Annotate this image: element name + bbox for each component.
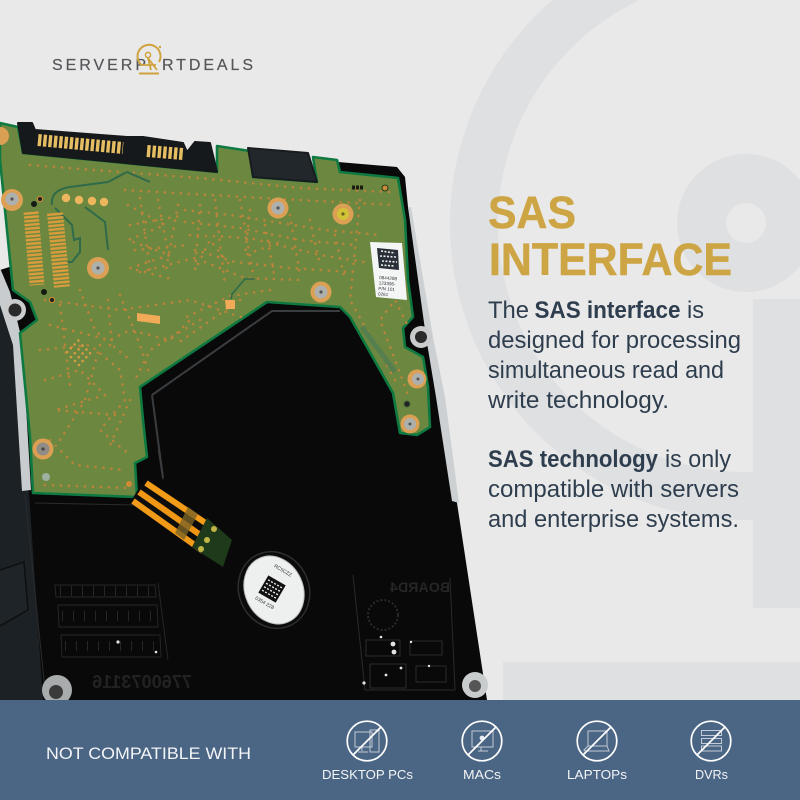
embossed grid left [55,583,168,660]
hard drive photo [0,123,488,705]
orange rectangular pads [137,300,235,324]
left charcoal casing [0,300,43,700]
heading [488,187,732,285]
logo: ServerPartDeals: RTDEALS [162,57,253,74]
white barcode label: 123396- [379,280,396,287]
label: desktop PCs: DESKTOP PCs [322,767,414,782]
sticker data matrix [258,575,286,603]
board mounting screws [0,127,426,487]
small via holes [31,196,410,407]
paragraph: SAS interface: designed for processing [488,327,741,354]
footer heading: NOT COMPATIBLE WITH [46,744,251,763]
drive body [0,162,487,700]
footer band [0,700,800,800]
white barcode label [370,242,407,300]
white barcode label: 0844288 [379,275,398,281]
round serial sticker [238,551,310,629]
SATA gold pins [38,140,123,148]
logo: ServerPartDeals [52,45,253,74]
black via row [352,186,363,190]
label: laptops: LAPTOPs [567,767,628,782]
black chassis edge lines [25,450,163,690]
paragraph: SAS technology: and enterprise systems. [488,506,739,533]
round serial sticker: 0354 228 [254,596,275,611]
icon: DVRs crossed out [691,721,731,761]
white barcode label: 0261 [378,291,389,297]
black cover highlight [152,311,340,478]
embossed grid dots [116,640,157,653]
round serial sticker: RC5CZZ [273,563,293,578]
paragraph: SAS technology: SAS technology [488,446,658,473]
label: Macs: MACs [463,767,502,782]
dense chip pad [67,340,92,365]
embossed grid right [353,575,455,690]
heading: SAS [488,187,576,238]
circuit board [0,123,430,497]
mounting holes [4,299,432,348]
flex cable band [175,507,198,540]
paragraph: SAS interface [487,297,741,414]
right silver rail [408,207,459,503]
icon: desktop PCs crossed out [347,721,387,761]
label: DVRs: DVRs [695,767,728,782]
paragraph: SAS technology [488,446,739,533]
left casing panel lines [0,562,28,626]
gold contact strip 2 [55,213,62,287]
decorative watermark: information symbol [474,0,800,700]
paragraph: SAS interface: is [687,297,704,324]
paragraph: SAS interface: SAS interface [534,297,680,324]
SATA connector [18,123,217,172]
SATA power pins [147,151,183,154]
embossed grid right: BOARD4 [390,579,450,595]
heading: INTERFACE [489,234,732,285]
dark traces [52,172,150,262]
secondary connector [248,148,317,182]
logo: ServerPartDeals: SERVERP [52,57,146,74]
paragraph: SAS interface: simultaneous read and [488,357,724,384]
paragraph: SAS technology: is only [665,446,732,473]
left silver rail [0,268,31,491]
paragraph: SAS interface: write technology. [487,387,669,414]
white barcode label: P/N 101 [378,286,396,292]
flex cable connector [192,518,232,567]
icon: laptops crossed out [577,721,617,761]
paragraph: SAS interface: The [488,297,529,324]
icon: Macs crossed out [462,721,502,761]
flex cable [131,478,232,567]
solder dots [30,165,410,488]
embossed part number: 7760073116 [92,672,192,692]
paragraph: SAS technology: compatible with servers [488,476,739,503]
serial number strip [362,327,395,372]
bottom chassis screws [42,672,488,700]
gold round test pads [62,194,108,206]
gold contact strip 1 [31,212,37,285]
